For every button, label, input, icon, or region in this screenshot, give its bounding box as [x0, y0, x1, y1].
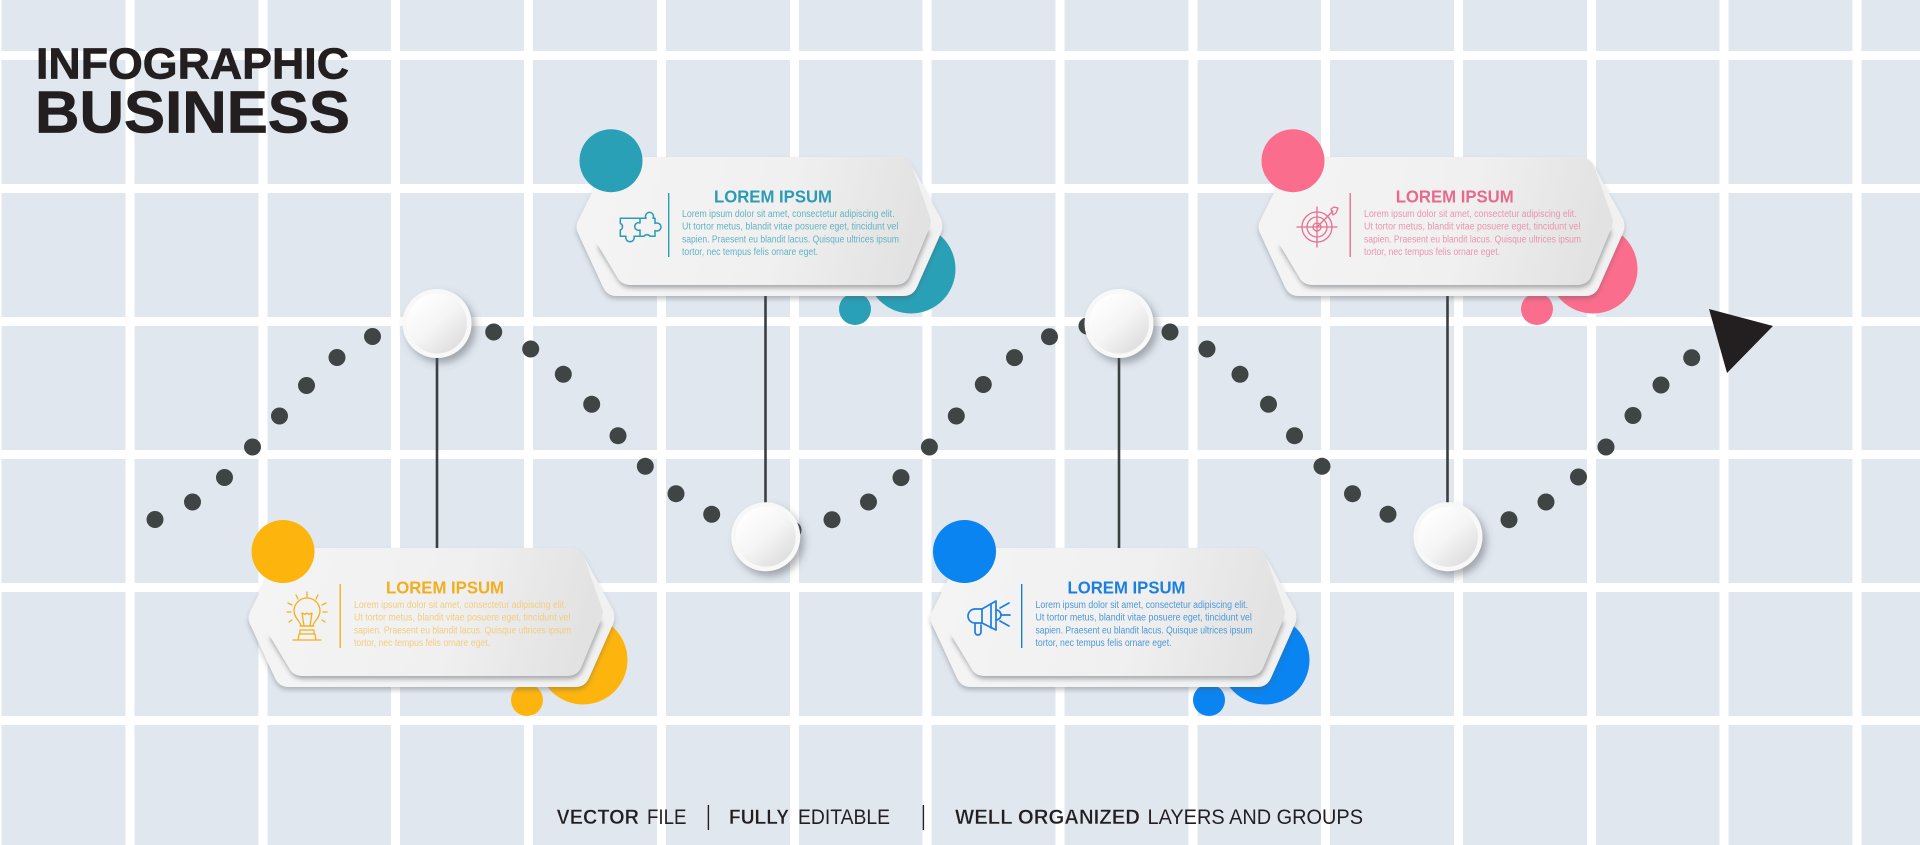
panel: blue card — [930, 520, 1310, 716]
footer tagline: EDITABLE — [798, 805, 890, 829]
divider — [668, 193, 669, 257]
body text: Lorem ipsum dolor sit amet, consectetur adipiscing elit. — [1036, 600, 1248, 611]
icon: light bulb — [287, 592, 327, 640]
body text: tortor, nec tempus felis ornare eget. — [354, 638, 490, 649]
body text: sapien. Praesent eu blandit lacus. Quisque ultrices ipsum — [1364, 234, 1581, 245]
icon: megaphone — [968, 601, 1010, 635]
body text — [1364, 209, 1581, 258]
body text: Ut tortor metus, blandit vitae posuere eget, tincidunt vel — [1364, 222, 1580, 233]
icon: target — [1297, 207, 1338, 247]
title — [35, 40, 350, 146]
divider — [1350, 193, 1351, 257]
title: INFOGRAPHIC — [36, 40, 349, 88]
node knobs — [402, 289, 1482, 571]
footer tagline: LAYERS AND GROUPS — [1148, 805, 1363, 829]
panel: yellow card — [248, 520, 628, 716]
connector lines — [437, 294, 1448, 550]
body text: Lorem ipsum dolor sit amet, consectetur adipiscing elit. — [354, 600, 566, 611]
body text: Lorem ipsum dolor sit amet, consectetur adipiscing elit. — [682, 209, 894, 220]
body text — [1036, 600, 1252, 649]
divider — [340, 584, 341, 648]
body text: Ut tortor metus, blandit vitae posuere eget, tincidunt vel — [682, 222, 898, 233]
footer tagline: FILE — [647, 805, 686, 829]
body text: tortor, nec tempus felis ornare eget. — [1036, 638, 1172, 649]
body text — [682, 209, 899, 258]
panel: pink card — [1258, 129, 1638, 325]
body text: Ut tortor metus, blandit vitae posuere eget, tincidunt vel — [354, 613, 570, 624]
body text: sapien. Praesent eu blandit lacus. Quisque ultrices ipsum — [682, 234, 899, 245]
footer tagline: FULLY — [729, 805, 789, 829]
footer tagline — [556, 805, 1363, 830]
body text: Lorem ipsum dolor sit amet, consectetur adipiscing elit. — [1364, 209, 1576, 220]
title: BUSINESS — [35, 78, 350, 146]
heading: LOREM IPSUM — [1068, 578, 1186, 598]
body text — [354, 600, 571, 649]
body text: sapien. Praesent eu blandit lacus. Quisque ultrices ipsum — [1036, 625, 1252, 636]
arrow head — [1709, 309, 1773, 373]
body text: tortor, nec tempus felis ornare eget. — [682, 247, 818, 258]
body text: Ut tortor metus, blandit vitae posuere eget, tincidunt vel — [1036, 613, 1252, 624]
dotted wave path — [146, 318, 1700, 538]
body text: tortor, nec tempus felis ornare eget. — [1364, 247, 1500, 258]
heading: LOREM IPSUM — [1396, 186, 1514, 206]
icon: puzzle — [620, 212, 661, 242]
footer tagline: WELL ORGANIZED — [955, 805, 1140, 829]
body text: sapien. Praesent eu blandit lacus. Quisque ultrices ipsum — [354, 625, 571, 636]
heading: LOREM IPSUM — [386, 578, 504, 598]
footer tagline: VECTOR — [556, 805, 639, 829]
divider — [1021, 584, 1022, 648]
heading: LOREM IPSUM — [714, 186, 832, 206]
panel: teal card — [576, 129, 956, 325]
